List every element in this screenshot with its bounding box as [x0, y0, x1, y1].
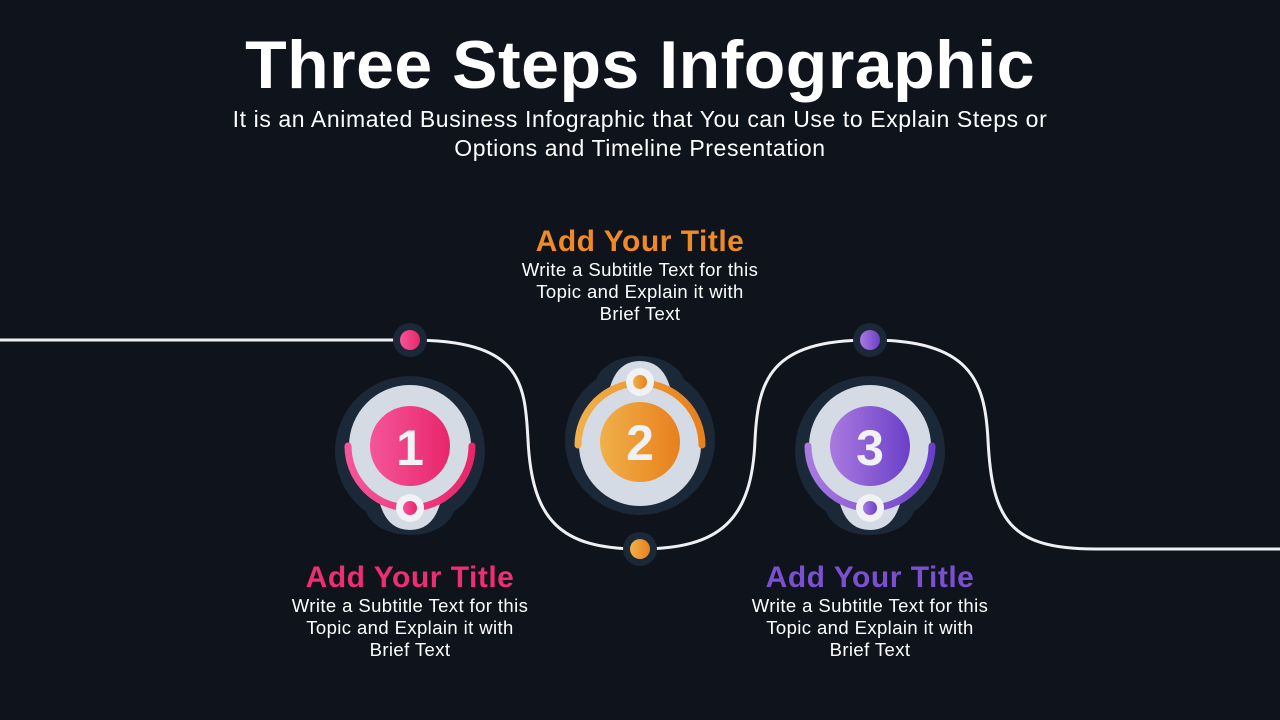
step 3 badge: 3	[856, 420, 884, 476]
step 2 badge: 2	[626, 415, 654, 471]
subtitle	[233, 106, 1047, 161]
node: purple	[853, 323, 887, 357]
node: pink	[393, 323, 427, 357]
step 1 badge: 1	[396, 420, 424, 476]
text: step 2: Write a Subtitle Text for this	[522, 259, 758, 280]
step 1 badge	[335, 376, 485, 535]
timeline path	[0, 340, 1280, 549]
subtitle: Options and Timeline Presentation	[454, 135, 826, 161]
text: step 2: Add Your Title	[536, 225, 744, 258]
text: step 3	[752, 561, 988, 660]
title: Three Steps Infographic	[245, 27, 1035, 103]
node: orange	[623, 532, 657, 566]
text: step 3: Brief Text	[830, 639, 910, 660]
step 3 badge	[795, 376, 945, 535]
text: step 1: Write a Subtitle Text for this	[292, 595, 528, 616]
text: step 2: Brief Text	[600, 303, 680, 324]
step 2 badge	[565, 356, 715, 515]
text: step 1: Topic and Explain it with	[306, 617, 514, 638]
text: step 2: Topic and Explain it with	[536, 281, 744, 302]
text: step 1: Add Your Title	[306, 561, 514, 594]
subtitle: It is an Animated Business Infographic that You can Use to Explain Steps or	[233, 106, 1047, 132]
text: step 3: Add Your Title	[766, 561, 974, 594]
text: step 1	[292, 561, 528, 660]
text: step 3: Write a Subtitle Text for this	[752, 595, 988, 616]
text: step 3: Topic and Explain it with	[766, 617, 974, 638]
text: step 1: Brief Text	[370, 639, 450, 660]
text: step 2	[522, 225, 758, 324]
